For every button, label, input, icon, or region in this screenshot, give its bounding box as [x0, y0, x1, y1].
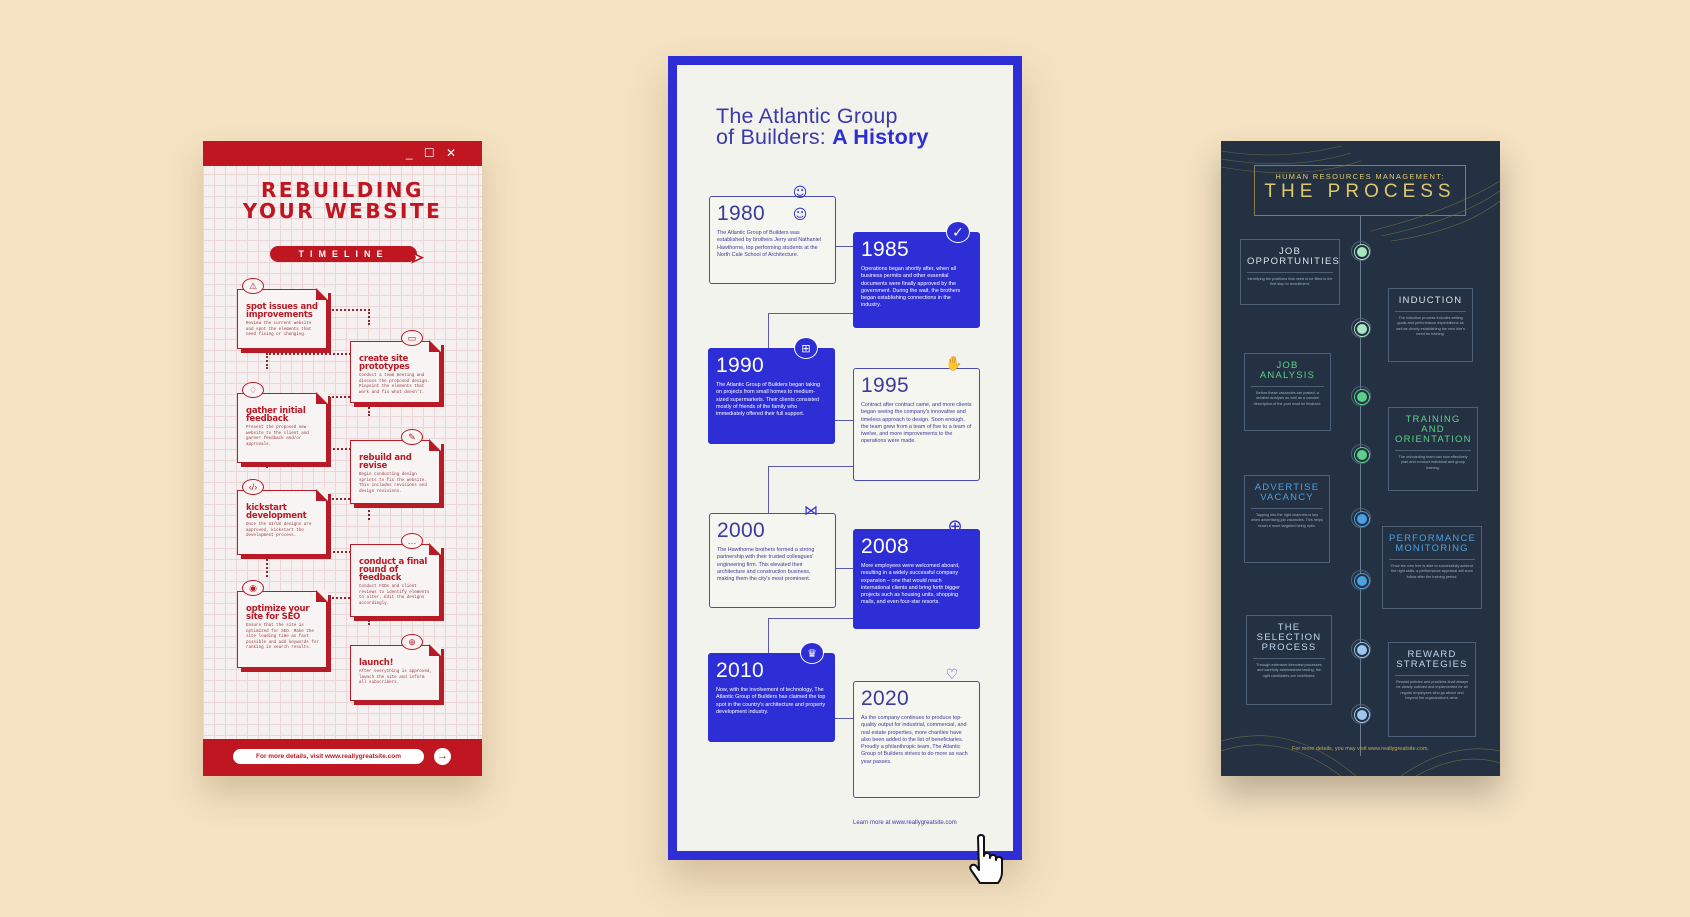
- card: job analysis: JOB ANALYSIS: [1260, 360, 1315, 381]
- icon: trophy: [800, 642, 824, 664]
- icon: handshake: ⋈: [804, 503, 818, 519]
- card: job analysis: Before these vacancies are posted, a detailed analysis as well as a concise description of the post must be finalized.: [1254, 391, 1321, 406]
- icon: hands: ✋: [945, 356, 963, 372]
- card: gather feedback: Present the proposed new website to the client and garner feedback and/or approvals.: [246, 426, 309, 447]
- card: 1995: Contract after contract came, and more clients began seeing the company's innovative and timeless approach to design. Soon enough, the team grew from a team of five to a team of twelve, and more improvements to the operations were made.: [861, 402, 972, 444]
- connectors: [297, 309, 370, 325]
- card: 1990: [708, 348, 835, 444]
- card: rebuild revise: rebuild and revise: [359, 453, 412, 471]
- icon: cursor hand: [969, 834, 1003, 884]
- card: rebuild revise: Begin conducting design sprints to fix the website. This includes revisions and design revisions.: [359, 473, 427, 494]
- icon: people: ☺☺: [793, 185, 807, 223]
- card: induction: [1388, 288, 1473, 362]
- icon: heart hand: ♡: [946, 667, 958, 683]
- card: selection: [1246, 615, 1332, 705]
- card: launch: [350, 645, 440, 701]
- card: performance: Once the new hire is able to successfully achieve the right skills, a performance appraisal will soon follow after the training period.: [1391, 564, 1473, 579]
- icon: check: [946, 221, 970, 243]
- card: gather feedback: gather initial feedback: [246, 406, 306, 424]
- card: 1995: 1995: [861, 374, 909, 397]
- title box: [1254, 165, 1466, 216]
- footer bar: [203, 739, 482, 776]
- icon: cart: [794, 337, 818, 359]
- card: performance: [1382, 526, 1482, 609]
- card: 2000: The Hawthorne brothers formed a strong partnership with their trusted colleagues' engineering firm. This elevated their architecture and construction business, making them the city's most prominent.: [717, 547, 814, 582]
- icon: cart: ⊞: [801, 342, 811, 355]
- title: [242, 178, 442, 223]
- card: 2010: Now, with the involvement of technology, The Atlantic Group of Builders has claimed the top spot in the country's architecture and property development industry.: [716, 687, 825, 715]
- card: training: [1388, 407, 1478, 491]
- card: 2008: [853, 529, 980, 629]
- card: selection: Through extensive interview processes and carefully administered testing, the right candidates are shortlisted.: [1256, 663, 1322, 678]
- timeline pill: [270, 246, 417, 262]
- card: 1980: [709, 196, 836, 284]
- card: kickstart: [237, 490, 327, 555]
- window title bar: [203, 141, 482, 166]
- card: 1990: The Atlantic Group of Builders began taking on projects from small homes to medium-sized supermarkets. Their clients consisted mostly of friends of the family who immediately offered their full support.: [716, 382, 820, 417]
- card: selection: THE SELECTION PROCESS: [1257, 622, 1321, 653]
- title: YOUR WEBSITE: [243, 199, 442, 223]
- card: advertise: Tapping into the right channels is key when advertising job vacancies. This helps reach a more targeted hiring optic.: [1251, 513, 1323, 528]
- panel: rebuilding website: ‹/›: [249, 482, 257, 492]
- icon: arrow: [434, 748, 451, 765]
- panel: rebuilding website: [203, 141, 482, 776]
- card: optimize SEO: [237, 591, 327, 668]
- card: 2020: [853, 681, 980, 798]
- nodes: [1351, 241, 1371, 724]
- card: 1980: 1980: [717, 202, 765, 225]
- card: reward: [1388, 642, 1476, 737]
- connectors: [836, 246, 854, 247]
- panel: rebuilding website: ✎: [408, 432, 416, 442]
- card: 2010: 2010: [716, 659, 764, 682]
- panel: atlantic history: [668, 56, 1022, 860]
- card: spot issues: spot issues and improvements: [246, 302, 318, 320]
- card: optimize SEO: Ensure that the site is optimized for SEO. Make the site loading time as fast possible and add keywords for ranking in search results.: [246, 624, 319, 650]
- card: 1985: 1985: [861, 238, 909, 261]
- title: REBUILDING: [261, 178, 424, 202]
- window title bar: _ ☐ ✕: [406, 146, 460, 160]
- card: create prototypes: Conduct a team meeting and discuss the proposed design. Pinpoint the elements that work and fix what doesn't.: [359, 374, 429, 395]
- card: 2008: More employees were welcomed aboard, resulting in a widely successful company expansion – one that would reach international clients and bring forth bigger projects such as housing units, shopping malls, and even four-star resorts.: [861, 563, 960, 605]
- card: launch: launch!: [359, 658, 393, 668]
- card: kickstart: kickstart development: [246, 503, 307, 521]
- panel: rebuilding website: ➤: [411, 249, 423, 265]
- card: job analysis: [1244, 353, 1331, 431]
- card: create prototypes: create site prototypes: [359, 354, 410, 372]
- card: 2008: 2008: [861, 535, 909, 558]
- title: of Builders: A History: [716, 125, 929, 149]
- title box: THE PROCESS: [1264, 181, 1456, 202]
- title: The Atlantic Group: [716, 104, 898, 128]
- card: optimize SEO: optimize your site for SEO: [246, 604, 309, 622]
- icon: trophy: ♛: [807, 647, 817, 660]
- card: 1995: [853, 368, 980, 481]
- card: 1990: 1990: [716, 354, 764, 377]
- card: final feedback: [350, 544, 440, 617]
- card: spot issues: [237, 289, 327, 349]
- card: job opportunities: Identifying the positions that need to be filled is the first step to recruitment.: [1247, 277, 1333, 286]
- card: kickstart: Once the UI/UX designs are approved, kickstart the development process.: [246, 523, 311, 538]
- card: create prototypes: [350, 341, 440, 403]
- card: job opportunities: [1240, 239, 1340, 305]
- footer link: Learn more at www.reallygreatsite.com: [853, 820, 957, 826]
- footer pill: [233, 749, 424, 764]
- card: reward: REWARD STRATEGIES: [1396, 649, 1468, 670]
- card: reward: Reward policies and practices shall always be clearly outlined and implemented for all regular employees who go above and beyond the organization's aims.: [1396, 680, 1468, 700]
- panel: HR process: [1221, 141, 1500, 776]
- card: 1985: Operations began shortly after, when all business permits and other essential documents were finally approved by the government. During the wait, the brothers began establishing connections in the industry.: [861, 266, 960, 308]
- timeline pill: TIMELINE: [298, 249, 388, 259]
- icon: globe: ⊕: [947, 516, 963, 537]
- card: 1985: [853, 232, 980, 328]
- card: job opportunities: JOB OPPORTUNITIES: [1247, 246, 1340, 267]
- card: 1980: The Atlantic Group of Builders was established by brothers Jerry and Nathaniel Hawthorne, top performing students at the North Cale School of Architecture.: [717, 230, 821, 258]
- title: [716, 104, 929, 149]
- panel: rebuilding website: …: [408, 536, 416, 546]
- panel: rebuilding website: ⊕: [408, 637, 416, 647]
- card: spot issues: Review the current website and spot the elements that need fixing or changing.: [246, 322, 311, 337]
- card: training: TRAINING AND ORIENTATION: [1395, 414, 1472, 445]
- footer pill: For more details, visit www.reallygreatsite.com: [256, 753, 401, 760]
- card: gather feedback: [237, 393, 327, 463]
- panel: rebuilding website: ♢: [249, 385, 257, 395]
- card: final feedback: conduct a final round of feedback: [359, 557, 427, 583]
- card: advertise: [1244, 475, 1330, 563]
- card: induction: The induction process includes setting goals and performance expectations as well as clearly establishing the new hire's need for training.: [1396, 316, 1465, 336]
- footer text: For more details, you may visit www.reallygreatsite.com.: [1292, 746, 1429, 752]
- icon: arrow: →: [437, 750, 448, 762]
- card: final feedback: Conduct FGDs and client reviews to identify elements to alter. Edit the designs accordingly.: [359, 585, 429, 606]
- card: 2000: [709, 513, 836, 608]
- card: 2010: [708, 653, 835, 742]
- card: training: The onboarding team can now effectively plan and conduct individual and group training.: [1398, 455, 1468, 470]
- panel: rebuilding website: ▭: [408, 333, 416, 343]
- card: rebuild revise: [350, 440, 440, 504]
- card: launch: After everything is approved, launch the site and inform all subscribers.: [359, 670, 432, 685]
- card: 2020: As the company continues to produce top-quality output for industrial, commercial, and real estate properties, more charities have also been added to the list of beneficiaries. Proudly a philanthropic team, The Atlantic Group of Builders strives to do more as each year passes.: [861, 715, 968, 765]
- card: advertise: ADVERTISE VACANCY: [1255, 482, 1319, 503]
- panel: rebuilding website: ◉: [249, 583, 257, 593]
- card: 2000: 2000: [717, 519, 765, 542]
- card: induction: INDUCTION: [1399, 295, 1462, 306]
- title box: HUMAN RESOURCES MANAGEMENT:: [1275, 172, 1445, 181]
- card: 2020: 2020: [861, 687, 909, 710]
- icon: check: ✓: [952, 225, 964, 241]
- panel: rebuilding website: ⚠: [249, 281, 257, 291]
- card: performance: PERFORMANCE MONITORING: [1389, 533, 1476, 554]
